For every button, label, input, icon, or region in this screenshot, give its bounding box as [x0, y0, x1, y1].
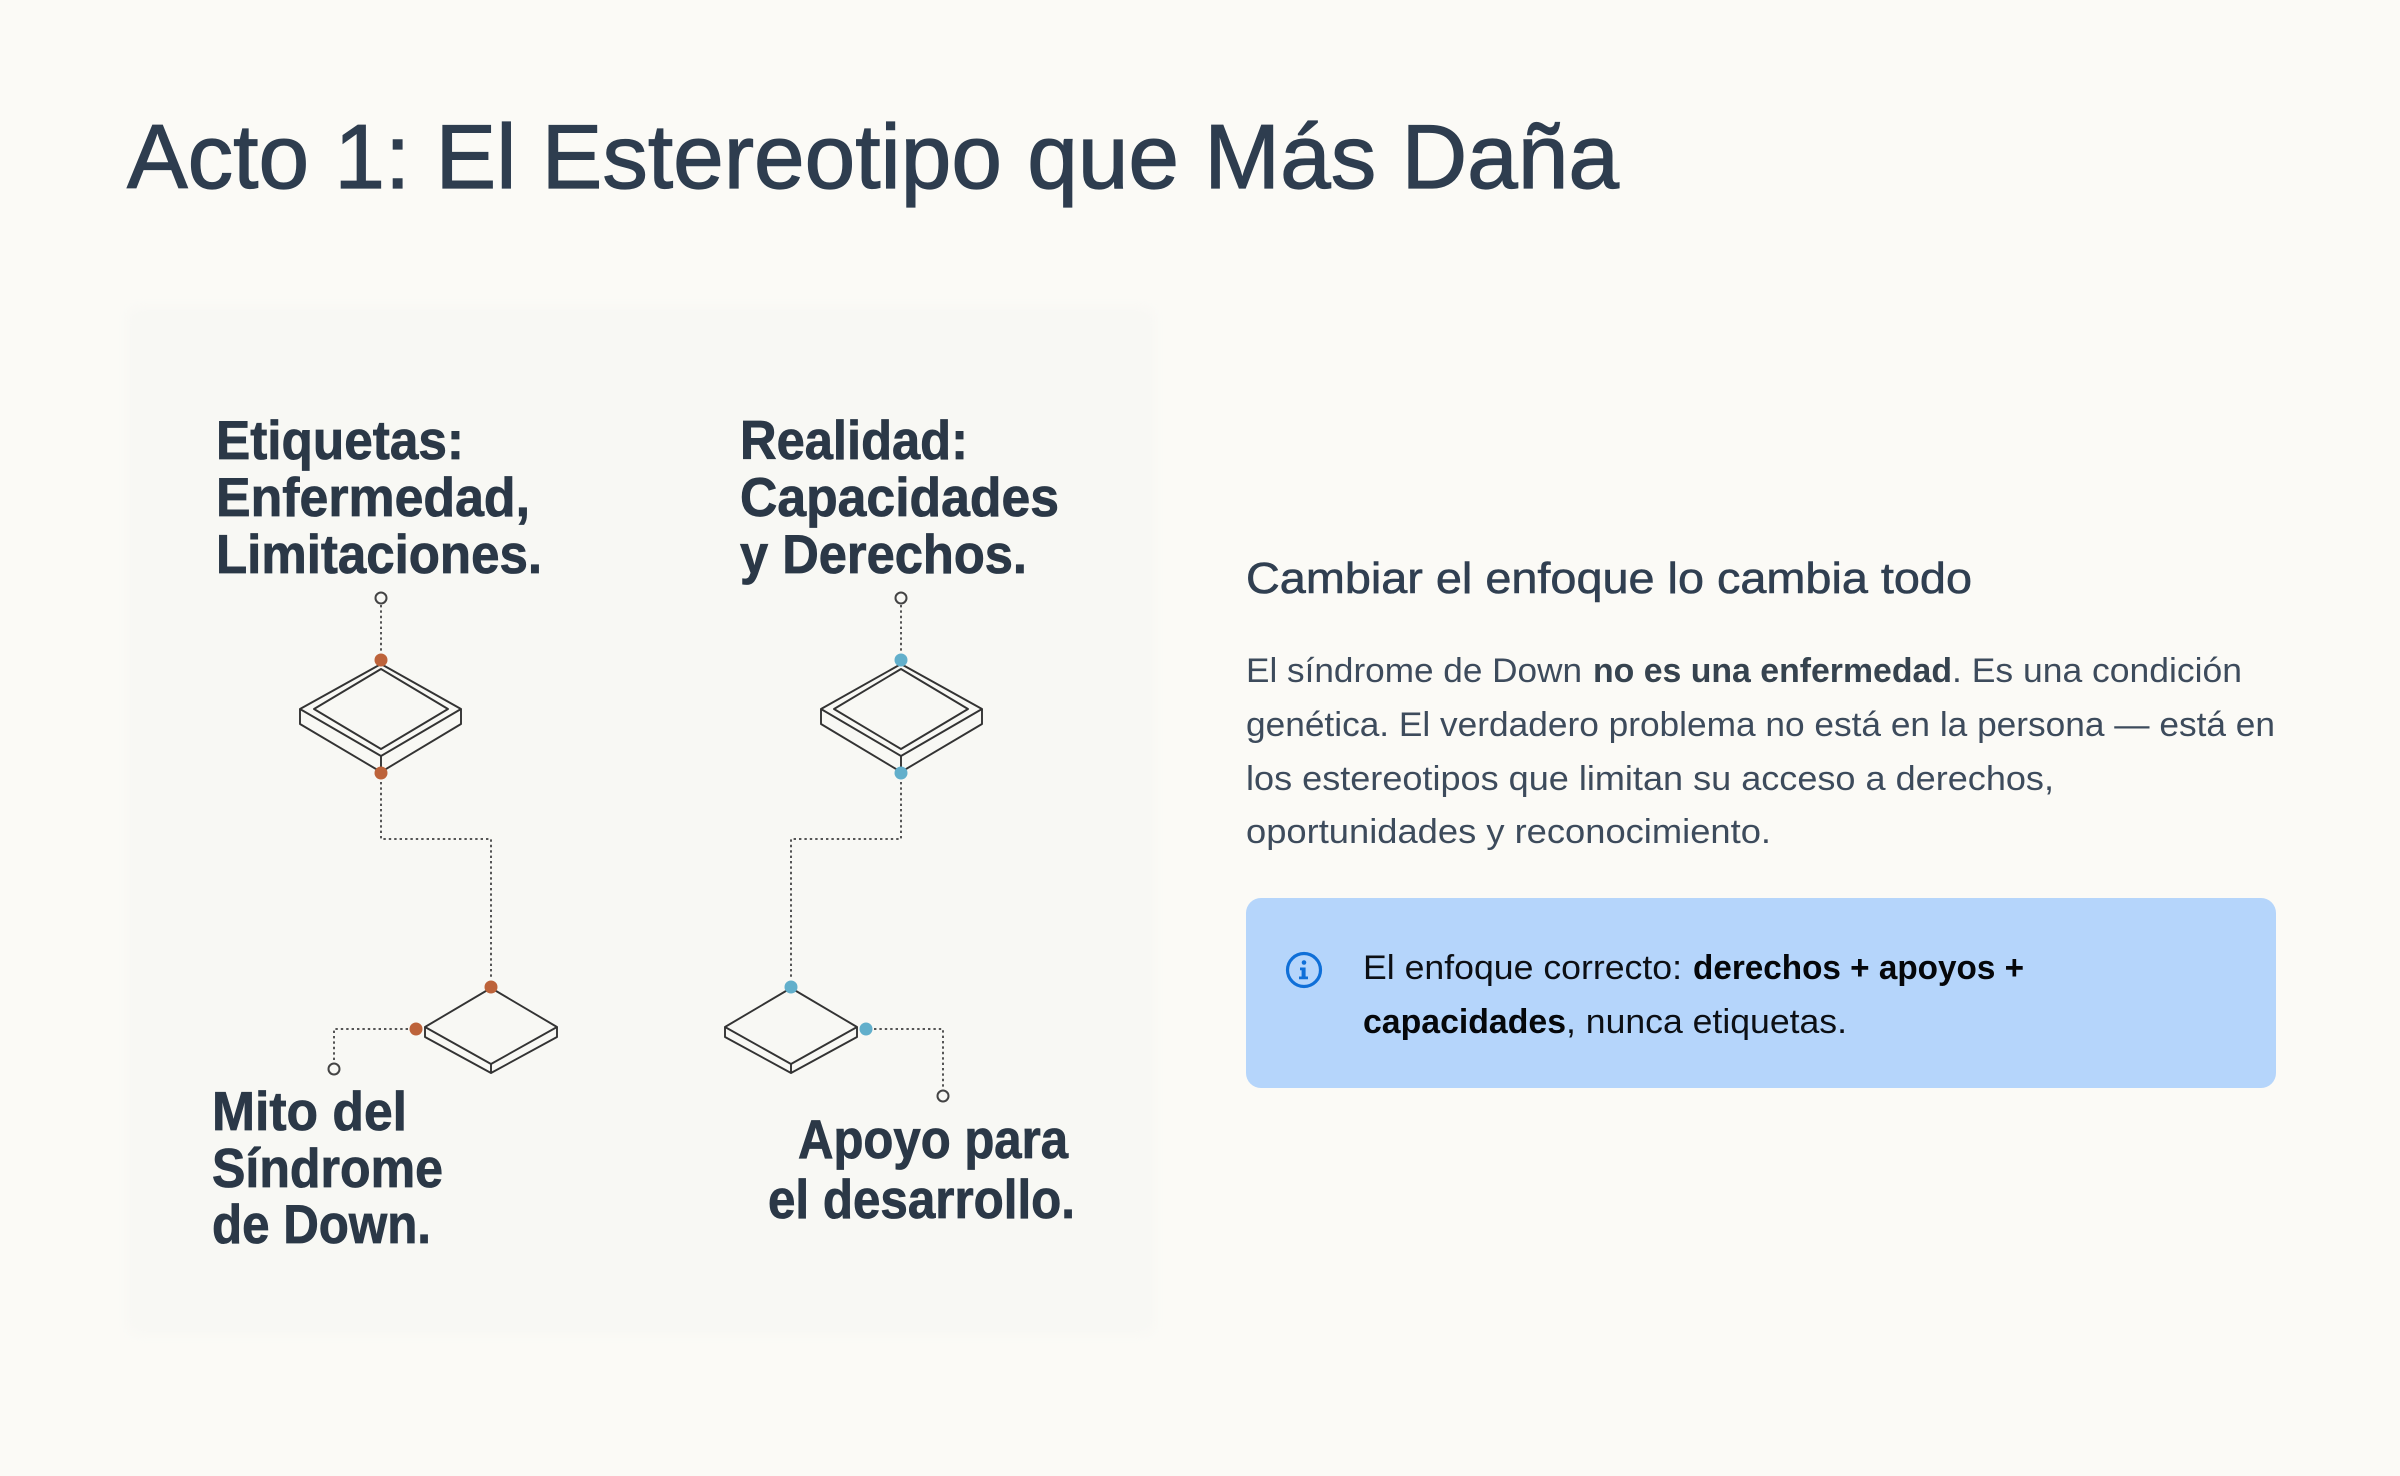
label: Mito: Síndrome: [212, 1137, 443, 1199]
text block: body paragraph: [1246, 652, 2275, 851]
label: Mito: [212, 1080, 443, 1255]
label: Etiquetas: [216, 409, 542, 585]
label: Realidad: [740, 409, 1059, 585]
arrow: right connector: [791, 782, 901, 979]
text block: body paragraph: El síndrome de Down: [1246, 652, 1582, 690]
diagram: right upper isometric block: [821, 592, 982, 780]
label: Apoyo: Apoyo para: [798, 1108, 1068, 1170]
callout text: , nunca etiquetas.: [1566, 1003, 1847, 1041]
callout text: El enfoque correcto:: [1363, 949, 1682, 987]
label: Mito: Mito del: [212, 1080, 407, 1142]
heading: Cambiar el enfoque: Cambiar el enfoque lo cambia todo: [1246, 555, 1972, 603]
callout text: derechos + apoyos +: [1693, 949, 2024, 987]
panel: diagram: [127, 307, 1155, 1335]
icon: info: [1288, 954, 1320, 986]
diagram: right lower isometric block: [725, 980, 948, 1102]
label: Apoyo: [768, 1108, 1075, 1230]
text block: body paragraph: los estereotipos que limitan su acceso a derechos,: [1246, 760, 2054, 798]
label: Etiquetas: Etiquetas:: [216, 409, 464, 471]
text block: body paragraph: no es una enfermedad: [1593, 652, 1952, 690]
callout text: [1363, 949, 2024, 1041]
arrow: left connector: [381, 782, 491, 979]
label: Apoyo: el desarrollo.: [768, 1168, 1075, 1230]
label: Etiquetas: Enfermedad,: [216, 466, 530, 528]
title: Acto 1: El Estereotipo que Más Daña: [127, 107, 1619, 208]
diagram: left upper isometric block: [300, 592, 461, 780]
text block: body paragraph: . Es una condición: [1952, 652, 2242, 690]
diagram: left lower isometric block: [328, 980, 557, 1074]
label: Realidad: y Derechos.: [740, 523, 1027, 585]
callout text: capacidades: [1363, 1003, 1566, 1041]
label: Etiquetas: Limitaciones.: [216, 523, 542, 585]
label: Realidad: Capacidades: [740, 466, 1059, 528]
text block: body paragraph: oportunidades y reconocimiento.: [1246, 813, 1771, 851]
label: Mito: de Down.: [212, 1193, 431, 1255]
text block: body paragraph: genética. El verdadero problema no está en la persona — está en: [1246, 706, 2275, 744]
label: Realidad: Realidad:: [740, 409, 968, 471]
callout: [1246, 898, 2276, 1088]
